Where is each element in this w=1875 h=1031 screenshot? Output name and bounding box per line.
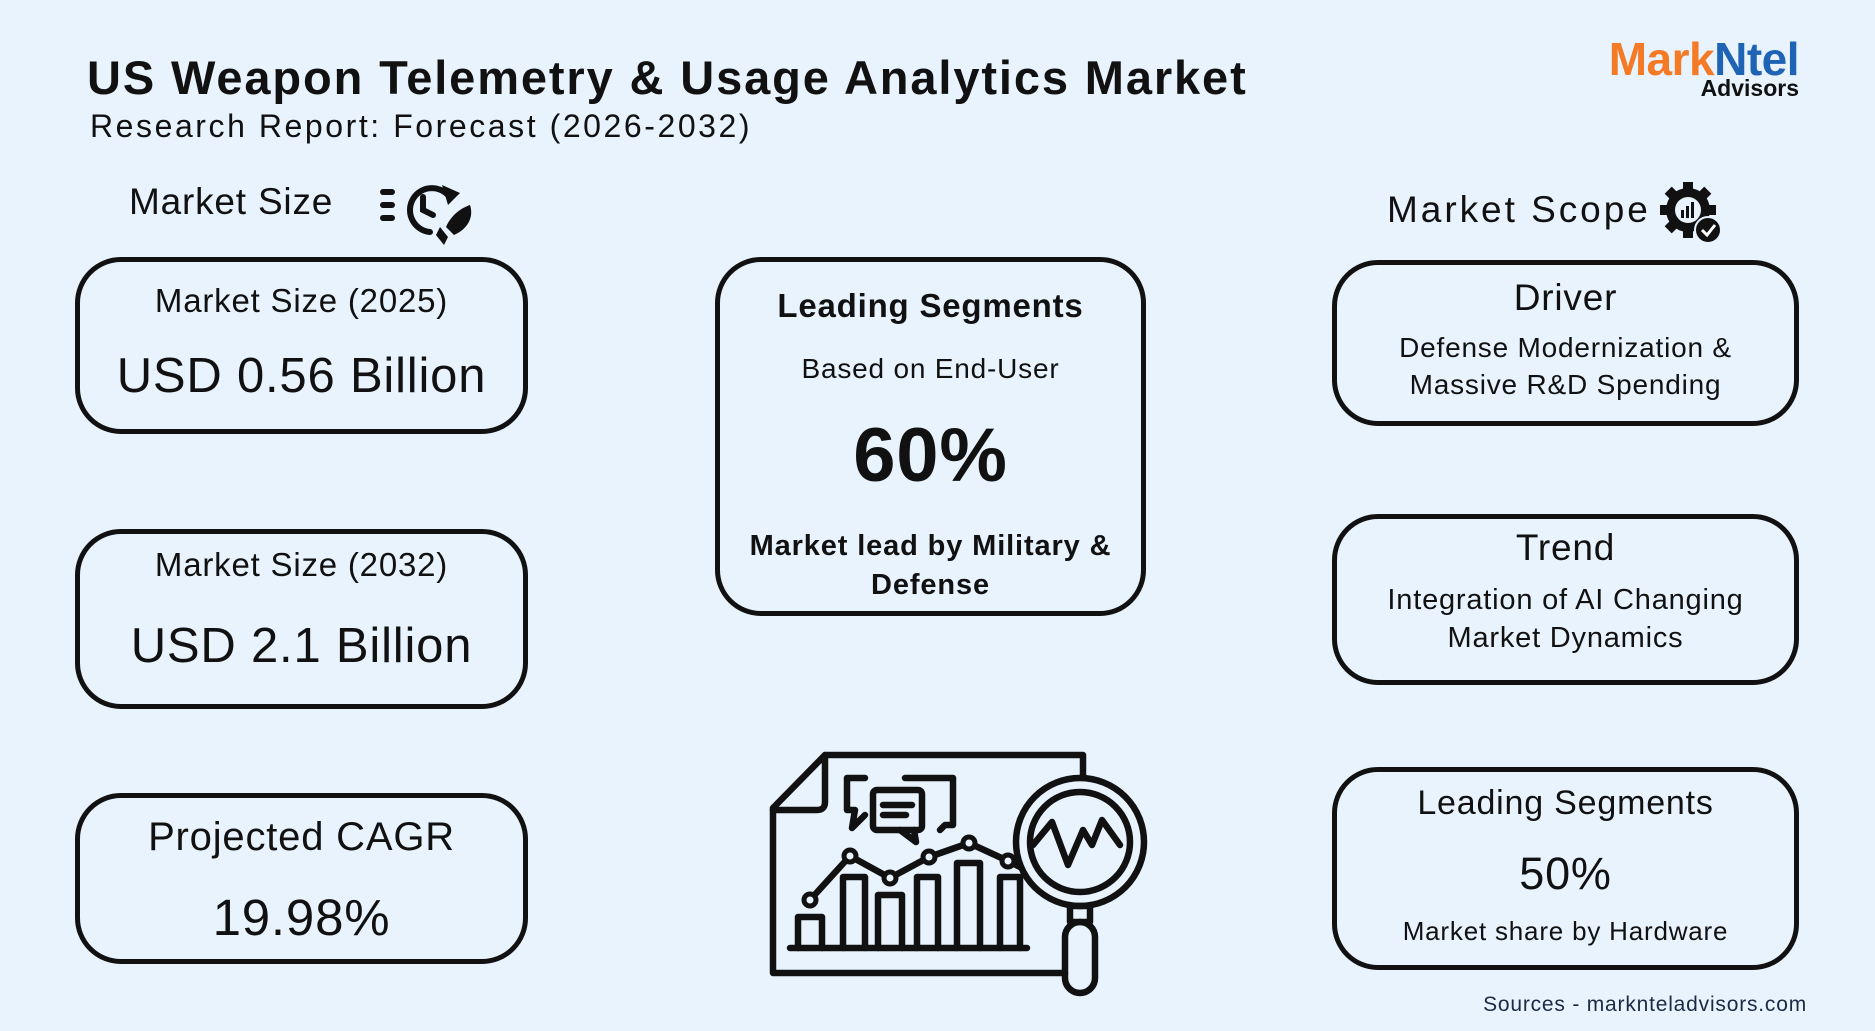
- panel: market size 2032: Market Size (2032): [155, 546, 448, 583]
- panel: leading segments end-user: 60%: [853, 413, 1008, 498]
- logo: Advisors: [1701, 75, 1799, 101]
- panel: leading segments hardware: [1332, 767, 1799, 970]
- panel: leading segments hardware: Market share by Hardware: [1403, 916, 1728, 946]
- panel: leading segments hardware: Leading Segments: [1417, 784, 1714, 822]
- panel: leading segments end-user: Based on End-User: [802, 353, 1059, 384]
- panel: trend: Trend: [1516, 527, 1615, 568]
- panel: leading segments end-user: [715, 257, 1146, 616]
- panel: driver: Driver: [1514, 277, 1617, 318]
- panel: market size 2032: USD 2.1 Billion: [131, 619, 472, 673]
- panel: driver: Massive R&D Spending: [1410, 369, 1721, 400]
- panel: driver: [1332, 260, 1799, 426]
- sources: Sources - marknteladvisors.com: [1483, 993, 1807, 1016]
- icon: clock rocket: [380, 185, 472, 245]
- panel: trend: Integration of AI Changing: [1387, 584, 1744, 616]
- heading: market scope: Market Scope: [1387, 189, 1651, 230]
- panel: leading segments end-user: Market lead by Military &: [750, 530, 1111, 562]
- illustration: report with magnifier: [770, 752, 1148, 996]
- panel: leading segments hardware: 50%: [1519, 848, 1612, 899]
- panel: market size 2025: [75, 257, 528, 434]
- panel: market size 2025: Market Size (2025): [155, 282, 448, 319]
- panel: market size 2025: USD 0.56 Billion: [117, 349, 486, 403]
- panel: CAGR: Projected CAGR: [148, 815, 455, 859]
- panel: trend: [1332, 514, 1799, 685]
- title: US Weapon Telemetry & Usage Analytics Market: [87, 51, 1248, 104]
- panel: driver: Defense Modernization &: [1399, 332, 1732, 363]
- panel: leading segments end-user: Defense: [871, 569, 990, 601]
- logo: MarkNtel: [1609, 33, 1799, 85]
- panel: market size 2032: [75, 529, 528, 709]
- panel: trend: Market Dynamics: [1448, 622, 1684, 654]
- heading: market size: Market Size: [129, 181, 333, 222]
- icon: gear: [1660, 182, 1720, 242]
- panel: CAGR: [75, 793, 528, 964]
- panel: leading segments end-user: Leading Segments: [777, 287, 1084, 324]
- subtitle: Research Report: Forecast (2026-2032): [90, 108, 752, 144]
- panel: CAGR: 19.98%: [213, 889, 390, 946]
